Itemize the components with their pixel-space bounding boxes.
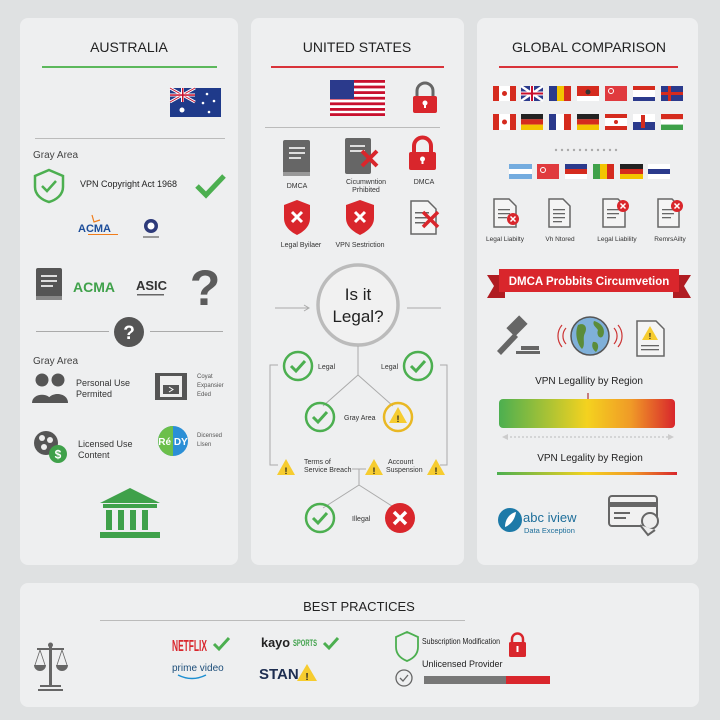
banner: dmca: DMCA Probbits Circumvetion — [509, 276, 669, 288]
warning: account suspension: ! — [372, 466, 376, 476]
text: vpn copyright act: VPN Copyright Act 1968 — [80, 179, 177, 189]
icon: doc with x — [411, 201, 438, 234]
icon row: documents: Legal Liabilty — [486, 236, 525, 243]
check: legal left — [284, 352, 312, 380]
text: vpn legallity: VPN Legallity by Region — [535, 376, 643, 387]
icon: green shield — [35, 170, 63, 202]
icon: book with x — [345, 138, 377, 174]
text: gray area: Gray Area — [33, 150, 78, 161]
banner: dmca — [487, 269, 691, 298]
bar: unlicensed — [424, 676, 550, 684]
text: film small: Eded — [197, 392, 211, 398]
logo: acma green: ACMA — [73, 279, 115, 295]
warning: account suspension — [365, 459, 383, 476]
icon: question mark: ? — [190, 260, 220, 316]
panel: australia — [20, 18, 238, 565]
circle: is it legal: Legal? — [332, 307, 384, 326]
warning: terms of service: ! — [284, 466, 288, 476]
logo: abc iview — [498, 508, 577, 535]
text: film small: Expansier — [197, 383, 224, 389]
text: licensed small: Llsen — [197, 442, 211, 448]
icon: bank — [100, 488, 160, 538]
text: vpn sestriction: VPN Sestriction — [335, 242, 385, 249]
icon: red lock — [413, 83, 437, 113]
panel: best practices — [20, 583, 699, 707]
icon: lock dmca — [409, 138, 436, 170]
icon row: documents: RemrsAilty — [654, 236, 686, 243]
icon: reel with dollar — [34, 431, 67, 463]
icon: red lock — [509, 634, 526, 657]
panel: united states — [251, 18, 464, 565]
icon: check circle — [396, 670, 412, 686]
icon: gavel — [497, 315, 540, 355]
logo: kayo sports: SPORTS — [293, 638, 317, 648]
flowchart: ! — [434, 466, 438, 476]
heading: united states: UNITED STATES — [303, 39, 411, 55]
logo: acma orange — [78, 215, 118, 235]
check: illegal — [306, 504, 334, 532]
flowchart: Terms of — [304, 459, 331, 466]
text: vpn legality: VPN Legality by Region — [537, 453, 643, 464]
flowchart: Suspension — [386, 467, 423, 474]
icon: book dmca — [283, 140, 310, 176]
icon: check netflix — [214, 638, 229, 649]
logo: circle: Ré DY — [158, 437, 188, 448]
heading: global comparison: GLOBAL COMPARISON — [512, 39, 666, 55]
text: circumvention: Cicumwntion — [346, 179, 386, 186]
flowchart: Legal — [318, 364, 336, 371]
flowchart — [270, 346, 447, 533]
text: licensed use: Licensed Use — [78, 439, 133, 449]
warning: terms of service — [277, 459, 295, 476]
icon: check — [197, 176, 224, 195]
icon: people — [32, 374, 68, 403]
arrows — [275, 305, 441, 311]
text: personal use: Permited — [76, 389, 112, 399]
text: licensed use: Content — [78, 450, 110, 460]
text: subscription modification: Subscription Modification — [422, 636, 500, 646]
icon: shield outline — [396, 632, 418, 661]
logo: stan: STAN — [259, 666, 299, 683]
flowchart: Service Breach — [304, 467, 352, 474]
icon: check kayo — [324, 638, 338, 648]
icon row: documents — [486, 199, 686, 243]
circle: is it legal — [318, 265, 398, 345]
icon: red shield 1 — [284, 200, 310, 235]
flags grid — [493, 86, 683, 179]
divider with question icon — [36, 317, 223, 347]
text: legal byilaer: Legal Byilaer — [281, 242, 322, 249]
check: legal right — [404, 352, 432, 380]
logo: crest — [143, 219, 159, 238]
icon: card with hand — [609, 496, 658, 535]
icon: red shield 2 — [346, 200, 374, 235]
heading: australia: AUSTRALIA — [90, 39, 169, 55]
flowchart: Account — [388, 459, 413, 466]
logo: kayo sports: kayo — [261, 635, 290, 650]
logo: abc iview: abc iview — [523, 510, 577, 525]
icon row: documents: Legal Liability — [597, 236, 637, 243]
warning circle: ! — [396, 414, 400, 424]
heading: best practices: BEST PRACTICES — [303, 599, 415, 614]
logo: abc iview: Data Exception — [524, 526, 575, 535]
divider with question icon: ? — [123, 323, 135, 344]
logo: kayo sports — [261, 635, 317, 650]
text: circumvention: Prhibited — [352, 187, 380, 194]
text: personal use: Personal Use — [76, 378, 130, 388]
icon: scales — [34, 642, 68, 691]
text: dmca: DMCA — [287, 183, 308, 190]
text: gray area 2: Gray Area — [33, 356, 78, 367]
text: film small: Coyat — [197, 374, 213, 380]
icon: doc warning — [637, 321, 664, 356]
icon: film — [155, 373, 187, 400]
icon: australian flag — [170, 88, 221, 117]
icon: warning stan: ! — [305, 672, 309, 683]
logo: circle — [158, 426, 188, 456]
warning circle — [384, 403, 412, 431]
icon: book — [36, 268, 62, 300]
logo: netflix: NETFLIX — [172, 638, 207, 655]
icon: red x circle — [385, 503, 415, 533]
text: dmca 2: DMCA — [414, 179, 435, 186]
icon: us flag — [330, 80, 385, 116]
circle: is it legal: Is it — [345, 285, 371, 304]
flowchart: Legal — [381, 364, 399, 371]
logo: prime video: prime video — [172, 663, 224, 674]
check: gray area — [306, 403, 334, 431]
text: unlicensed provider: Unlicensed Provider — [422, 659, 503, 669]
panel: global comparison — [477, 18, 698, 565]
text: licensed small: Dicensed — [197, 433, 222, 439]
flowchart: Illegal — [352, 516, 371, 523]
flowchart: Gray Area — [344, 415, 376, 422]
icon: warning stan — [297, 664, 317, 683]
logo: acma orange: ACMA — [78, 223, 111, 235]
icon row: documents: Vh Ntored — [545, 236, 575, 243]
icon: doc warning: ! — [649, 332, 651, 341]
logo: asic: ASIC — [136, 278, 168, 293]
icon: globe with waves — [558, 317, 622, 355]
chart: gradient bar — [499, 393, 675, 440]
icon: reel with dollar: $ — [55, 448, 62, 462]
